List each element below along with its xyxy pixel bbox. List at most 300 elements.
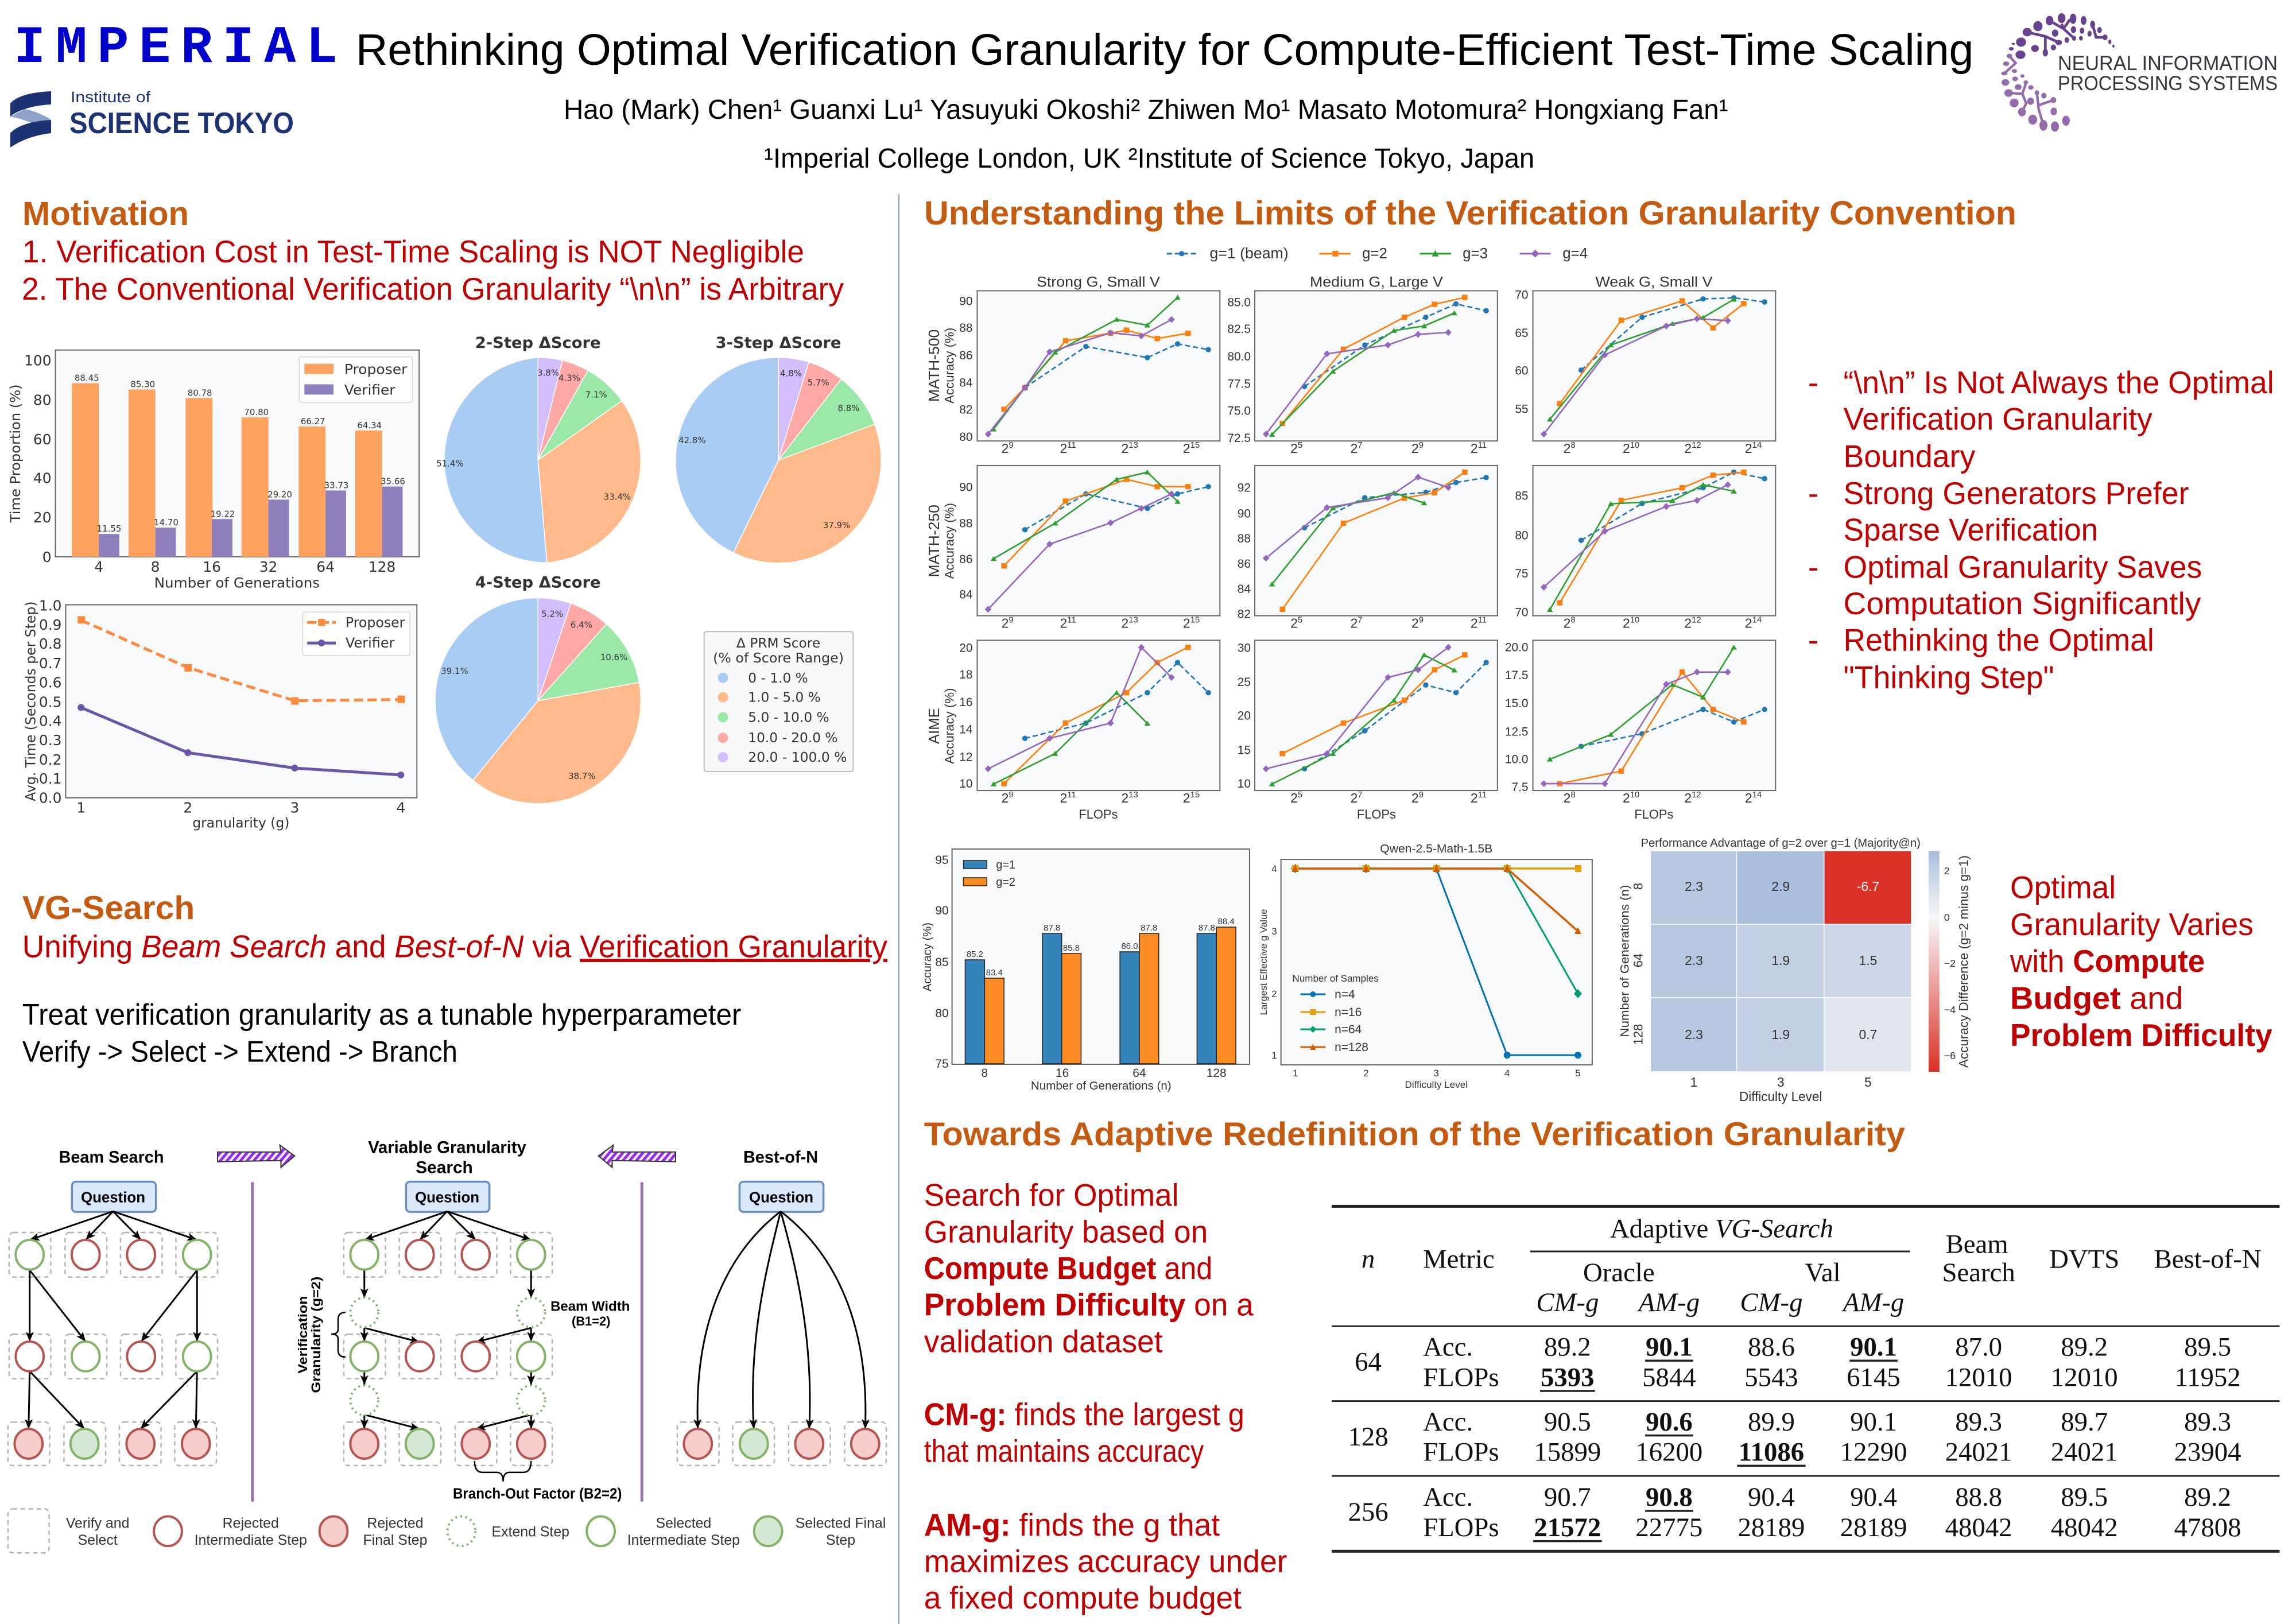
line chart: average time per step: 0.7 bbox=[39, 655, 61, 672]
x tick labels: 14 bbox=[1752, 615, 1762, 625]
pie legend: 1.0 - 5.0 % bbox=[748, 691, 821, 706]
bar chart: time proportion: 88.45 bbox=[75, 373, 99, 383]
x tick labels: 13 bbox=[1128, 440, 1138, 450]
line chart grid: accuracy vs FLOPs bbox=[926, 246, 1775, 821]
x tick labels: 2 bbox=[1411, 441, 1419, 456]
bar chart: accuracy by generations: 87.8 bbox=[1044, 923, 1060, 933]
logo: Institute of Science Tokyo bbox=[10, 88, 294, 148]
callout: optimal granularity varies: with Compute bbox=[2010, 943, 2205, 979]
x tick labels: 2 bbox=[1121, 790, 1128, 805]
heatmap: performance advantage: 2.9 bbox=[1771, 879, 1790, 894]
y tick labels: 90 bbox=[1238, 507, 1251, 520]
bar chart: accuracy by generations: 86.0 bbox=[1121, 941, 1138, 951]
logo: Imperial: IMPERIAL bbox=[14, 18, 348, 78]
variable granularity search tree: Beam Width bbox=[550, 1299, 630, 1314]
x tick labels: 2 bbox=[1745, 615, 1752, 630]
y tick labels: 12 bbox=[959, 750, 973, 763]
x tick labels: 2 bbox=[1471, 790, 1478, 805]
diagram legend: Intermediate Step bbox=[195, 1532, 307, 1548]
line chart: average time per step: 1.0 bbox=[39, 597, 61, 614]
pie chart: 3-step score: 37.9% bbox=[823, 520, 850, 530]
bar chart: accuracy by generations: g=2 bbox=[996, 876, 1015, 889]
bar chart: accuracy by generations: 83.4 bbox=[986, 968, 1003, 978]
diagram legend: Selected bbox=[656, 1515, 711, 1531]
line chart: average time per step: 0.8 bbox=[39, 635, 61, 652]
line chart: largest effective g: n=4 bbox=[1335, 988, 1355, 1001]
x tick labels: 7 bbox=[1358, 440, 1363, 450]
takeaways list: - bbox=[1808, 549, 1818, 584]
x tick labels: 2 bbox=[1684, 441, 1692, 456]
diagram titles: Variable Granularity bbox=[368, 1138, 526, 1157]
table row n=128: 90.1 bbox=[1850, 1407, 1897, 1437]
pie chart: 3-step score: 42.8% bbox=[678, 435, 705, 445]
callout: optimal granularity varies: Problem Difficulty bbox=[2010, 1017, 2272, 1053]
x tick labels: 12 bbox=[1692, 440, 1701, 450]
heatmap: performance advantage bbox=[1619, 837, 1971, 1104]
line chart: largest effective g: Difficulty Level bbox=[1405, 1079, 1468, 1090]
y tick labels: 15 bbox=[1238, 743, 1251, 757]
pie chart: 2-step score: 3.8% bbox=[537, 368, 559, 378]
pie chart: 4-step score: 4-Step ΔScore bbox=[475, 574, 601, 592]
y tick labels: 82 bbox=[959, 403, 973, 416]
table row n=128: 89.9 bbox=[1748, 1407, 1795, 1437]
heatmap: performance advantage: 64 bbox=[1631, 954, 1645, 967]
table row n=64: 89.2 bbox=[2061, 1332, 2108, 1362]
diagram legend: Rejected bbox=[223, 1515, 279, 1531]
table row n=256: 22775 bbox=[1635, 1513, 1702, 1542]
bar chart: time proportion: 80 bbox=[33, 392, 52, 408]
bar chart: time proportion: 85.30 bbox=[130, 379, 155, 389]
adaptive method explanation: Compute Budget and bbox=[924, 1250, 1212, 1286]
bar chart: time proportion: 40 bbox=[33, 470, 52, 487]
bar chart: time proportion: 14.70 bbox=[154, 517, 179, 528]
pie chart: 4-step score: 38.7% bbox=[568, 771, 595, 781]
table header: Search bbox=[1942, 1258, 2015, 1288]
heatmap: performance advantage: 2.3 bbox=[1685, 953, 1703, 968]
table row n=256: 90.8 bbox=[1646, 1482, 1693, 1512]
heading: VG-Search: VG-Search bbox=[22, 890, 195, 927]
line chart: largest effective g: 1 bbox=[1293, 1068, 1298, 1079]
x tick labels: 11 bbox=[1478, 615, 1487, 625]
table rules bbox=[1332, 1205, 2279, 1553]
line chart: average time per step bbox=[23, 597, 417, 831]
beam search tree: Question bbox=[81, 1189, 145, 1206]
x tick labels: 2 bbox=[1121, 441, 1128, 456]
bar chart: accuracy by generations: 85 bbox=[935, 956, 949, 969]
bar chart: accuracy by generations: 16 bbox=[1056, 1067, 1069, 1080]
table header: Val bbox=[1805, 1258, 1841, 1288]
table header bbox=[1362, 1214, 2262, 1317]
line chart: average time per step: 0.4 bbox=[39, 712, 61, 729]
table row n=256: 28189 bbox=[1738, 1513, 1805, 1542]
bar chart: accuracy by generations: 85.8 bbox=[1063, 943, 1080, 953]
motivation charts bbox=[7, 334, 881, 831]
variable granularity search tree: Granularity (g=2) bbox=[309, 1277, 323, 1393]
chart legend: g=4 bbox=[1562, 246, 1588, 262]
bar chart: time proportion: 19.22 bbox=[211, 509, 235, 519]
adaptive method explanation: Search for Optimal bbox=[924, 1177, 1178, 1213]
table row n=256: 89.2 bbox=[2184, 1482, 2231, 1512]
x tick labels: 2 bbox=[1002, 441, 1009, 456]
x tick labels: 2 bbox=[1060, 615, 1067, 630]
x tick labels: 11 bbox=[1067, 790, 1076, 800]
adaptive method explanation: Problem Difficulty on a bbox=[924, 1287, 1254, 1323]
heatmap: performance advantage: 1.5 bbox=[1859, 953, 1877, 968]
table row n=256: 256 bbox=[1348, 1497, 1389, 1527]
x tick labels: 2 bbox=[1060, 790, 1067, 805]
y tick labels: 80 bbox=[959, 431, 973, 444]
line chart: average time per step: 0.2 bbox=[39, 751, 61, 768]
heatmap: performance advantage: Number of Generations (n) bbox=[1619, 885, 1632, 1037]
arrow: left hatched bbox=[599, 1145, 676, 1168]
motivation point 2: 2. The Conventional Verification Granularity “\n\n” is Arbitrary bbox=[22, 271, 844, 307]
heatmap: performance advantage: 0.7 bbox=[1859, 1027, 1877, 1042]
x tick labels: 11 bbox=[1067, 440, 1076, 450]
y tick labels: 86 bbox=[959, 349, 973, 362]
line chart: average time per step: 0.5 bbox=[39, 694, 61, 711]
heading: Motivation: Motivation bbox=[22, 195, 189, 232]
logo: Institute of Science Tokyo: SCIENCE TOKYO bbox=[69, 107, 294, 140]
pie chart: 3-step score: 8.8% bbox=[837, 403, 859, 413]
bar chart: accuracy by generations: 87.8 bbox=[1141, 923, 1157, 933]
y tick labels: 80.0 bbox=[1227, 350, 1251, 363]
table row n=64: 89.2 bbox=[1544, 1332, 1591, 1362]
x tick labels: 2 bbox=[1060, 441, 1067, 456]
table header: CM-g bbox=[1536, 1288, 1599, 1317]
y tick labels: 10.0 bbox=[1505, 753, 1529, 766]
y tick labels: 7.5 bbox=[1512, 781, 1529, 794]
y tick labels: 10 bbox=[959, 777, 973, 790]
pie chart: 3-step score: 5.7% bbox=[808, 377, 829, 387]
y tick labels: 88 bbox=[959, 321, 973, 335]
bar chart: accuracy by generations: 75 bbox=[935, 1057, 949, 1071]
x tick labels: 2 bbox=[1002, 615, 1009, 630]
x tick labels: 8 bbox=[1570, 790, 1576, 800]
y tick labels: 82 bbox=[1238, 608, 1251, 621]
line chart: average time per step: 0.9 bbox=[39, 617, 61, 633]
x axis labels: FLOPs bbox=[1634, 807, 1674, 821]
variable granularity search tree bbox=[296, 1181, 630, 1502]
bar chart: time proportion: 33.73 bbox=[324, 480, 348, 491]
pie chart: 2-step score: 33.4% bbox=[604, 491, 631, 502]
x tick labels: 2 bbox=[1290, 441, 1298, 456]
table row n=64: 5844 bbox=[1642, 1362, 1696, 1392]
bar chart: time proportion: 11.55 bbox=[97, 524, 121, 534]
x tick labels: 13 bbox=[1128, 615, 1138, 625]
bar chart: time proportion: 60 bbox=[33, 431, 52, 448]
table row n=64 bbox=[1355, 1332, 2241, 1392]
logo: NeurIPS: PROCESSING SYSTEMS bbox=[2058, 72, 2278, 95]
pie legend: Δ PRM Score bbox=[736, 636, 820, 651]
adaptive method explanation: Granularity based on bbox=[924, 1214, 1208, 1249]
diagram titles: Best-of-N bbox=[743, 1148, 818, 1167]
takeaways list: “\n\n” Is Not Always the Optimal bbox=[1844, 365, 2274, 400]
table row n=256: 88.8 bbox=[1955, 1482, 2002, 1512]
x tick labels: 5 bbox=[1298, 790, 1302, 800]
table row n=256: Acc. bbox=[1423, 1482, 1473, 1512]
line chart: largest effective g: 4 bbox=[1271, 863, 1277, 874]
y tick labels: 12.5 bbox=[1505, 726, 1529, 739]
callout: optimal granularity varies bbox=[2010, 869, 2272, 1053]
bar chart: time proportion bbox=[7, 350, 419, 591]
table row n=128: 16200 bbox=[1635, 1437, 1702, 1467]
bar chart: time proportion: 64.34 bbox=[357, 420, 382, 431]
y tick labels: 85 bbox=[1515, 490, 1529, 503]
x tick labels: 9 bbox=[1419, 440, 1424, 450]
pie legend: 10.0 - 20.0 % bbox=[748, 731, 838, 746]
y tick labels: 90 bbox=[959, 294, 973, 308]
column titles: Strong G, Small V bbox=[1037, 274, 1160, 290]
pie chart: 2-step score: 4.3% bbox=[559, 373, 580, 383]
bar chart: time proportion: 70.80 bbox=[244, 407, 269, 417]
table row n=128: 23904 bbox=[2174, 1437, 2241, 1467]
variable granularity search tree: Branch-Out Factor (B2=2) bbox=[453, 1486, 622, 1502]
x tick labels: 2 bbox=[1471, 615, 1478, 630]
table row n=128: FLOPs bbox=[1423, 1437, 1499, 1467]
table row n=256: 48042 bbox=[1945, 1513, 2012, 1542]
x tick labels: 10 bbox=[1630, 790, 1639, 800]
line chart: average time per step: Proposer bbox=[346, 614, 405, 630]
y tick labels: 77.5 bbox=[1227, 378, 1251, 391]
table row n=128 bbox=[1348, 1407, 2241, 1467]
adaptive method explanation: that maintains accuracy bbox=[924, 1433, 1204, 1468]
adaptive method explanation: maximizes accuracy under bbox=[924, 1543, 1287, 1579]
x tick labels: 5 bbox=[1298, 440, 1302, 450]
takeaways list: "Thinking Step" bbox=[1844, 659, 2054, 695]
bar chart: accuracy by generations: g=1 bbox=[996, 859, 1015, 871]
chart legend: g=1 (beam) bbox=[1209, 246, 1289, 262]
x tick labels: 2 bbox=[1564, 615, 1570, 630]
table row n=64: 88.6 bbox=[1748, 1332, 1795, 1362]
bar chart: time proportion: Number of Generations bbox=[154, 575, 320, 591]
logo: NeurIPS: NEURAL INFORMATION bbox=[2058, 52, 2278, 75]
line chart: average time per step: 4 bbox=[397, 800, 405, 816]
chart legend bbox=[1167, 246, 1588, 262]
bottom charts bbox=[921, 837, 1971, 1104]
bar chart: time proportion: 8 bbox=[151, 559, 160, 575]
line chart: largest effective g bbox=[1258, 843, 1592, 1090]
x tick labels: 10 bbox=[1630, 615, 1639, 625]
bar chart: time proportion: 20 bbox=[33, 509, 52, 526]
takeaways list: Boundary bbox=[1844, 438, 1976, 474]
y tick labels: 55 bbox=[1515, 402, 1529, 416]
y tick labels: 86 bbox=[959, 553, 973, 566]
table row n=128: 24021 bbox=[1945, 1437, 2012, 1467]
pie legend bbox=[704, 631, 853, 772]
table header: Beam bbox=[1946, 1229, 2008, 1259]
x tick labels: 15 bbox=[1190, 615, 1200, 625]
bar chart: accuracy by generations: 90 bbox=[935, 904, 949, 917]
table row n=64: FLOPs bbox=[1423, 1362, 1499, 1392]
arrow: right hatched bbox=[218, 1145, 294, 1168]
table header: AM-g bbox=[1637, 1288, 1700, 1317]
takeaways list: Computation Significantly bbox=[1844, 586, 2201, 621]
table header: AM-g bbox=[1841, 1288, 1904, 1317]
x tick labels: 14 bbox=[1752, 790, 1762, 800]
data lines bbox=[988, 297, 1764, 784]
x tick labels: 13 bbox=[1128, 790, 1138, 800]
bar chart: accuracy by generations: 85.2 bbox=[967, 949, 983, 959]
y tick labels: 25 bbox=[1238, 676, 1251, 689]
motivation point 1: 1. Verification Cost in Test-Time Scaling is NOT Negligible bbox=[22, 234, 804, 269]
line chart: largest effective g: 2 bbox=[1363, 1068, 1369, 1079]
chart legend: g=3 bbox=[1463, 246, 1488, 262]
bar chart: accuracy by generations: Number of Generations (n) bbox=[1031, 1080, 1172, 1092]
heading: adaptive redefinition: Towards Adaptive Redefinition of the Verification Granularity bbox=[924, 1116, 1905, 1153]
x tick labels: 11 bbox=[1478, 440, 1487, 450]
y tick labels: 88 bbox=[1238, 532, 1251, 545]
x tick labels: 2 bbox=[1471, 441, 1478, 456]
x axis labels: FLOPs bbox=[1357, 807, 1396, 821]
logo: NeurIPS bbox=[2001, 13, 2278, 131]
y tick labels: 75.0 bbox=[1227, 404, 1251, 417]
bar chart: accuracy by generations: Accuracy (%) bbox=[921, 923, 934, 991]
table row n=64: 6145 bbox=[1847, 1362, 1901, 1392]
pie legend: 0 - 1.0 % bbox=[748, 671, 808, 686]
row labels: MATH-500 bbox=[926, 330, 943, 402]
chart legend: g=2 bbox=[1362, 246, 1387, 262]
x tick labels: 2 bbox=[1564, 441, 1570, 456]
table header: DVTS bbox=[2049, 1244, 2119, 1274]
heatmap: performance advantage: −6 bbox=[1944, 1050, 1956, 1061]
x tick labels: 2 bbox=[1183, 615, 1190, 630]
table row n=64: 11952 bbox=[2175, 1362, 2241, 1392]
description line 1: Treat verification granularity as a tunable hyperparameter bbox=[22, 998, 741, 1031]
diagram: search comparison bbox=[8, 1138, 886, 1553]
pie chart: 2-step score: 2-Step ΔScore bbox=[475, 334, 601, 352]
diagram legend: Select bbox=[78, 1532, 118, 1548]
y tick labels: 20 bbox=[1238, 710, 1251, 723]
x tick labels: 9 bbox=[1419, 615, 1424, 625]
heatmap: performance advantage: -6.7 bbox=[1857, 879, 1879, 894]
best-of-n tree: Question bbox=[749, 1189, 813, 1206]
y tick labels: 80 bbox=[1515, 529, 1529, 542]
line chart: largest effective g: 1 bbox=[1271, 1050, 1277, 1061]
pie chart: 4-step score bbox=[435, 574, 641, 804]
x tick labels: 7 bbox=[1358, 615, 1363, 625]
x tick labels: 7 bbox=[1358, 790, 1363, 800]
table header: Adaptive VG-Search bbox=[1610, 1214, 1833, 1244]
x axis labels bbox=[1079, 807, 1674, 821]
y tick labels: 92 bbox=[1238, 482, 1251, 495]
table row n=128: 89.3 bbox=[2184, 1407, 2231, 1437]
pie legend: 5.0 - 10.0 % bbox=[748, 710, 829, 725]
callout: optimal granularity varies: Granularity Varies bbox=[2010, 906, 2254, 942]
table row n=256: 47808 bbox=[2174, 1513, 2241, 1542]
heatmap: performance advantage: Difficulty Level bbox=[1739, 1089, 1822, 1104]
pie chart: 2-step score: 51.4% bbox=[436, 459, 464, 469]
bar chart: time proportion: 4 bbox=[94, 559, 103, 575]
pie legend: (% of Score Range) bbox=[713, 651, 844, 666]
y tick labels: 15.0 bbox=[1505, 697, 1529, 710]
bar chart: time proportion: 0 bbox=[42, 549, 52, 565]
bar chart: time proportion: 29.20 bbox=[267, 489, 292, 499]
table header: Oracle bbox=[1583, 1258, 1655, 1288]
bar chart: accuracy by generations: 95 bbox=[935, 854, 949, 867]
x tick labels: 12 bbox=[1692, 615, 1701, 625]
line chart: largest effective g: Qwen-2.5-Math-1.5B bbox=[1380, 843, 1492, 855]
pie chart: 4-step score: 5.2% bbox=[541, 608, 563, 619]
callout: optimal granularity varies: Optimal bbox=[2010, 869, 2116, 905]
heatmap: performance advantage: 5 bbox=[1864, 1075, 1872, 1090]
authors: Hao (Mark) Chen¹ Guanxi Lu¹ Yasuyuki Okoshi² Zhiwen Mo¹ Masato Motomura² Hongxiang Fan¹ bbox=[564, 95, 1728, 125]
x tick labels: 11 bbox=[1478, 790, 1487, 800]
x tick labels: 14 bbox=[1752, 440, 1762, 450]
x tick labels: 2 bbox=[1411, 615, 1419, 630]
y tick labels: 70 bbox=[1515, 606, 1529, 619]
x tick labels: 12 bbox=[1692, 790, 1701, 800]
adaptive method explanation: validation dataset bbox=[924, 1323, 1163, 1359]
heatmap: performance advantage: 8 bbox=[1631, 883, 1645, 890]
bar chart: time proportion: 128 bbox=[369, 559, 395, 575]
line chart: average time per step: 0.6 bbox=[39, 675, 61, 691]
heatmap: performance advantage: 2.3 bbox=[1685, 1027, 1703, 1042]
table row n=256: 48042 bbox=[2051, 1513, 2118, 1542]
callout: optimal granularity varies: Budget and bbox=[2010, 980, 2183, 1016]
y tick labels: 65 bbox=[1515, 327, 1529, 340]
bar chart: accuracy by generations: 80 bbox=[935, 1007, 949, 1020]
x tick labels: 8 bbox=[1570, 440, 1576, 450]
y tick labels: 18 bbox=[959, 668, 973, 681]
y tick labels: 20.0 bbox=[1505, 641, 1529, 654]
line chart: average time per step: 1 bbox=[76, 800, 86, 816]
table row n=128: 90.6 bbox=[1646, 1407, 1693, 1437]
variable granularity search tree: (B1=2) bbox=[572, 1314, 610, 1328]
table row n=64: 5543 bbox=[1744, 1362, 1798, 1392]
y tick labels: 90 bbox=[959, 481, 973, 494]
table row n=128: 90.5 bbox=[1544, 1407, 1591, 1437]
diagram legend: Intermediate Step bbox=[627, 1532, 740, 1548]
x tick labels: 2 bbox=[1564, 790, 1570, 805]
x tick labels: 11 bbox=[1067, 615, 1076, 625]
y tick labels: 75 bbox=[1515, 567, 1529, 580]
bar chart: accuracy by generations bbox=[921, 849, 1250, 1092]
table row n=256: 90.7 bbox=[1544, 1482, 1591, 1512]
table row n=128: Acc. bbox=[1423, 1407, 1473, 1437]
heatmap: performance advantage: 2.3 bbox=[1685, 879, 1703, 894]
x tick labels: 9 bbox=[1009, 440, 1014, 450]
takeaways list: Optimal Granularity Saves bbox=[1844, 549, 2202, 584]
text panels on the right bbox=[924, 365, 2274, 1615]
x tick labels: 15 bbox=[1190, 790, 1200, 800]
panel frames bbox=[977, 291, 1775, 790]
table row n=64: 64 bbox=[1355, 1347, 1382, 1377]
line chart: average time per step: granularity (g) bbox=[192, 815, 289, 831]
bar chart: time proportion: 35.66 bbox=[381, 476, 405, 487]
table row n=64: 5393 bbox=[1541, 1362, 1595, 1392]
bar chart: accuracy by generations: 88.4 bbox=[1218, 917, 1235, 927]
x tick labels: 15 bbox=[1190, 440, 1200, 450]
column titles: Medium G, Large V bbox=[1310, 274, 1443, 290]
results table bbox=[1332, 1205, 2279, 1553]
y tick labels: 20 bbox=[959, 641, 973, 654]
x tick labels: 2 bbox=[1351, 790, 1358, 805]
pie legend: 20.0 - 100.0 % bbox=[748, 750, 847, 765]
row labels bbox=[926, 328, 957, 764]
line chart: largest effective g: 3 bbox=[1271, 926, 1277, 937]
diagram legend bbox=[8, 1509, 886, 1553]
takeaways list: Sparse Verification bbox=[1844, 512, 2098, 548]
column titles: Weak G, Small V bbox=[1595, 274, 1713, 290]
heatmap: performance advantage: 1.9 bbox=[1771, 953, 1790, 968]
heatmap: performance advantage: 1 bbox=[1690, 1075, 1697, 1090]
line chart: average time per step: Avg. Time (Seconds per Step) bbox=[23, 602, 39, 801]
table row n=64: 89.5 bbox=[2184, 1332, 2231, 1362]
table row n=64: 12010 bbox=[2051, 1362, 2118, 1392]
x tick labels: 10 bbox=[1630, 440, 1639, 450]
y tick labels: 84 bbox=[959, 588, 973, 602]
row labels: Accuracy (%) bbox=[943, 503, 957, 579]
